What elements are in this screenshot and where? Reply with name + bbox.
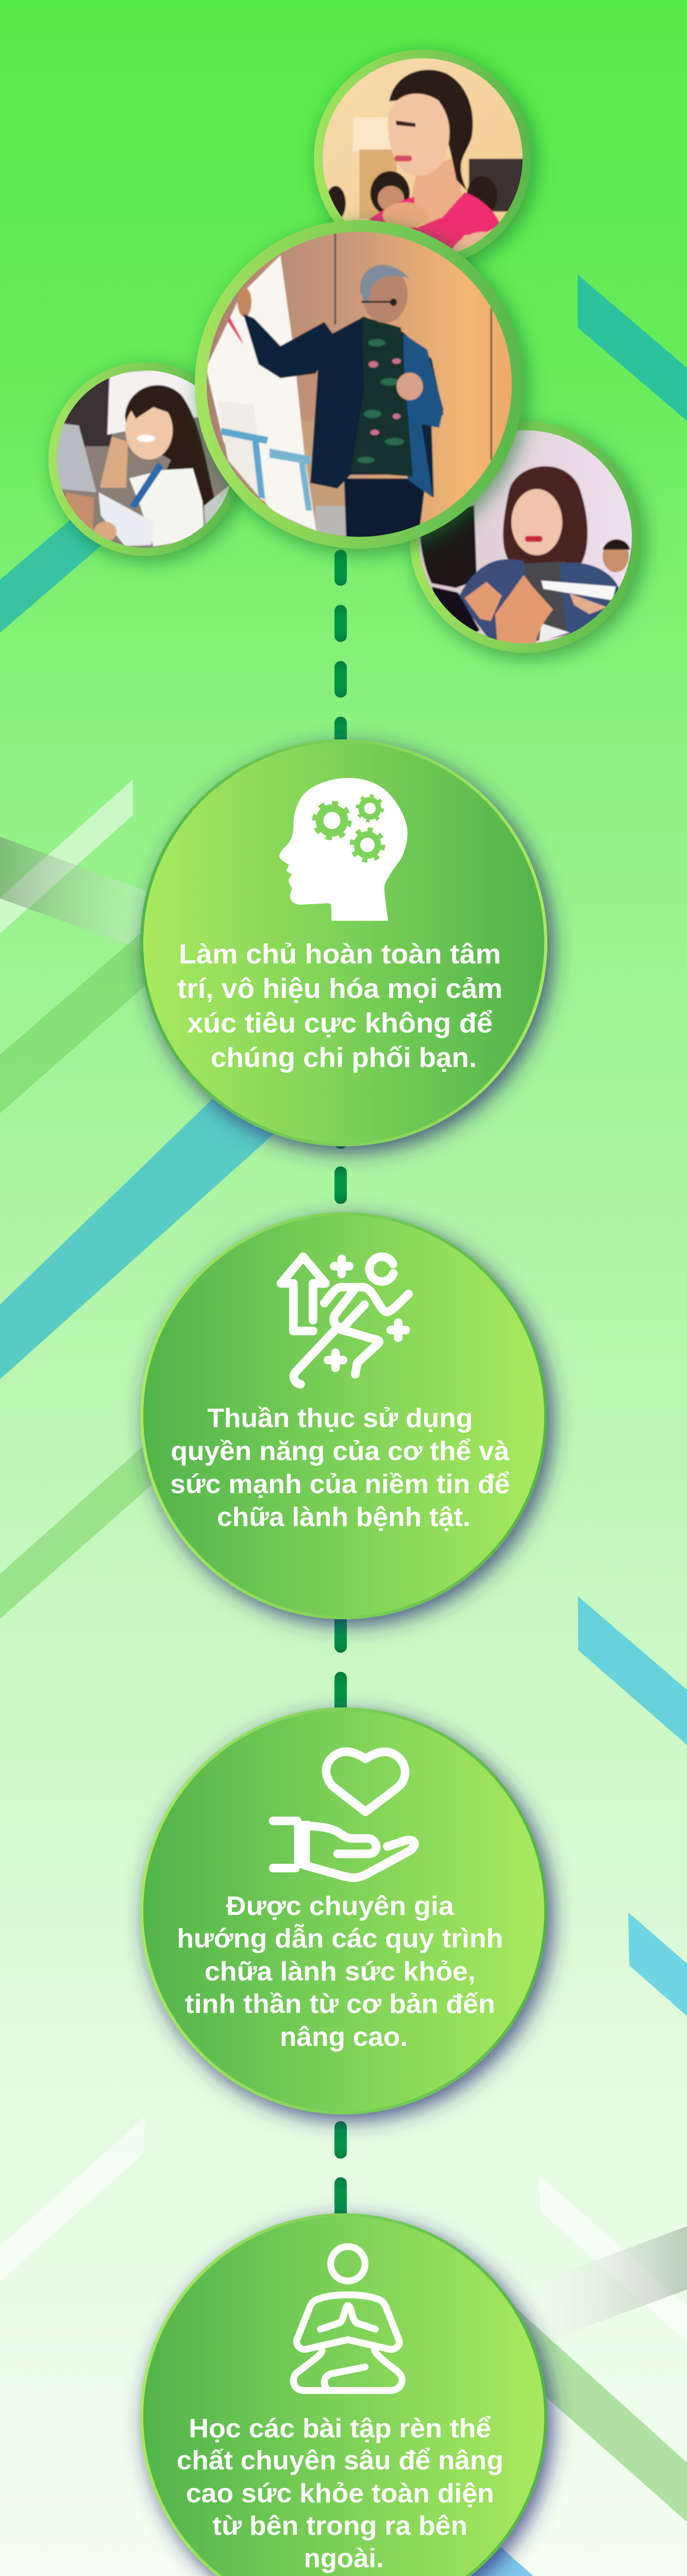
text: mastering the mind: chúng chi phối bạn. [211, 1042, 477, 1073]
text: body power and belief: sức mạnh của niềm tin để [170, 1469, 510, 1499]
icon: running person with pluses [281, 1257, 409, 1384]
text: physical training: ngoài. [304, 2544, 383, 2573]
text: mastering the mind: xúc tiêu cực không để [187, 1008, 493, 1039]
panel: body power and belief [140, 1212, 547, 1619]
text: expert guidance: hướng dẫn các quy trình [177, 1924, 503, 1954]
text: mastering the mind: trí, vô hiệu hóa mọi cảm [177, 973, 502, 1004]
text: body power and belief: Thuần thục sử dụng [207, 1403, 473, 1433]
photo: smiling woman with notebook [48, 362, 242, 556]
text: body power and belief: chữa lành bệnh tật. [217, 1502, 471, 1532]
text: expert guidance: tinh thần từ cơ bản đến [185, 1989, 495, 2019]
text: physical training: chất chuyên sâu để nâng [177, 2446, 504, 2476]
panel: expert guidance [140, 1707, 547, 2114]
icon: meditating person [293, 2247, 402, 2391]
photo: woman reading notes [409, 421, 641, 653]
connector dashes [334, 550, 347, 2576]
text: expert guidance: Được chuyên gia [226, 1891, 455, 1921]
text: expert guidance: nâng cao. [280, 2022, 408, 2052]
icon: head with gears [279, 778, 408, 921]
text: physical training: Học các bài tập rèn thể [189, 2414, 491, 2444]
photo: woman in pink shirt [307, 46, 534, 267]
panel: physical training [140, 2213, 547, 2576]
text: physical training: cao sức khỏe toàn diện [186, 2479, 494, 2509]
text: body power and belief: quyền năng của cơ thể và [171, 1436, 510, 1466]
text: mastering the mind: Làm chủ hoàn toàn tâm [179, 939, 501, 970]
text: physical training: từ bên trong ra bên [212, 2511, 467, 2541]
text: expert guidance: chữa lành sức khỏe, [205, 1957, 476, 1987]
icon: hand holding heart [273, 1752, 415, 1878]
panel: mastering the mind [140, 739, 547, 1146]
photo: presenter at flip chart [195, 220, 524, 549]
